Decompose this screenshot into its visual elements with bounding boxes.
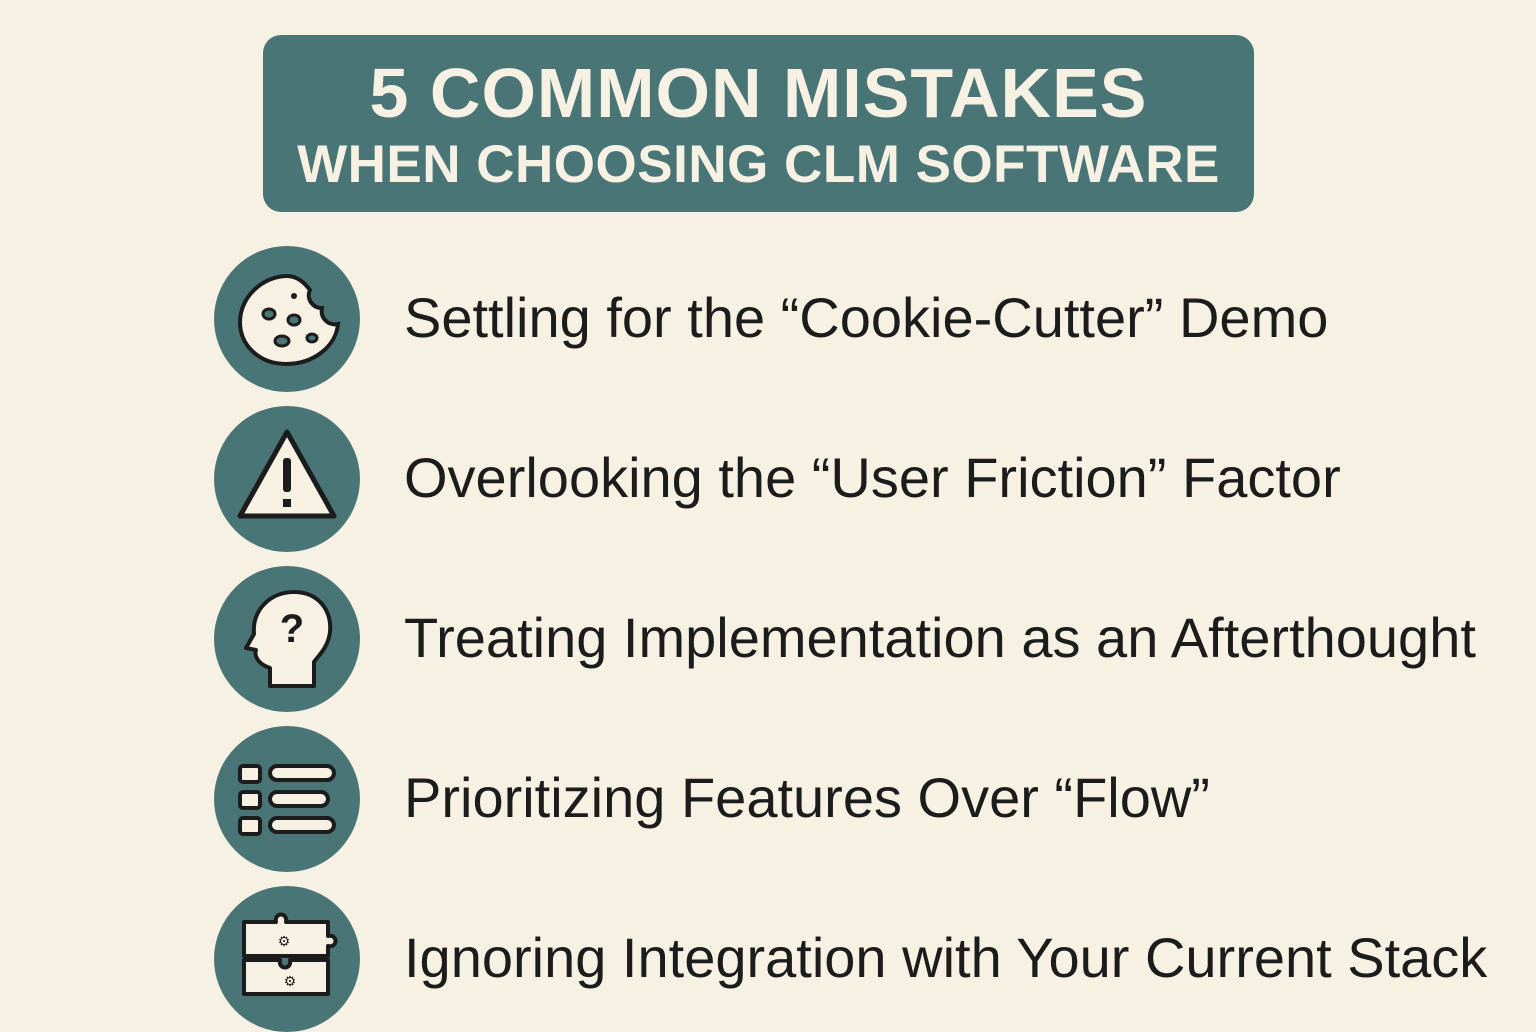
item 2	[214, 406, 1341, 552]
item 3	[214, 566, 1476, 712]
icon: head with question mark: ?	[280, 607, 304, 651]
text 5: Ignoring Integration with Your Current Stack	[404, 926, 1487, 989]
text 1: Settling for the “Cookie-Cutter” Demo	[404, 286, 1328, 349]
text 3: Treating Implementation as an Afterthought	[404, 606, 1476, 669]
text 4: Prioritizing Features Over “Flow”	[404, 766, 1210, 829]
icon: puzzle: ⚙	[278, 933, 290, 949]
icon: list	[214, 726, 360, 872]
icon: puzzle	[214, 886, 360, 1032]
icon: puzzle: ⚙	[284, 973, 296, 989]
icon: head with question mark	[214, 566, 360, 712]
item 5	[214, 886, 1488, 1032]
icon: warning	[214, 406, 360, 552]
icon: cookie	[214, 246, 360, 392]
text 2: Overlooking the “User Friction” Factor	[404, 446, 1341, 509]
title	[263, 35, 1254, 212]
item 1	[214, 246, 1328, 392]
item 4	[214, 726, 1210, 872]
title: 5 COMMON MISTAKES	[370, 54, 1147, 132]
title: WHEN CHOOSING CLM SOFTWARE	[297, 135, 1220, 194]
